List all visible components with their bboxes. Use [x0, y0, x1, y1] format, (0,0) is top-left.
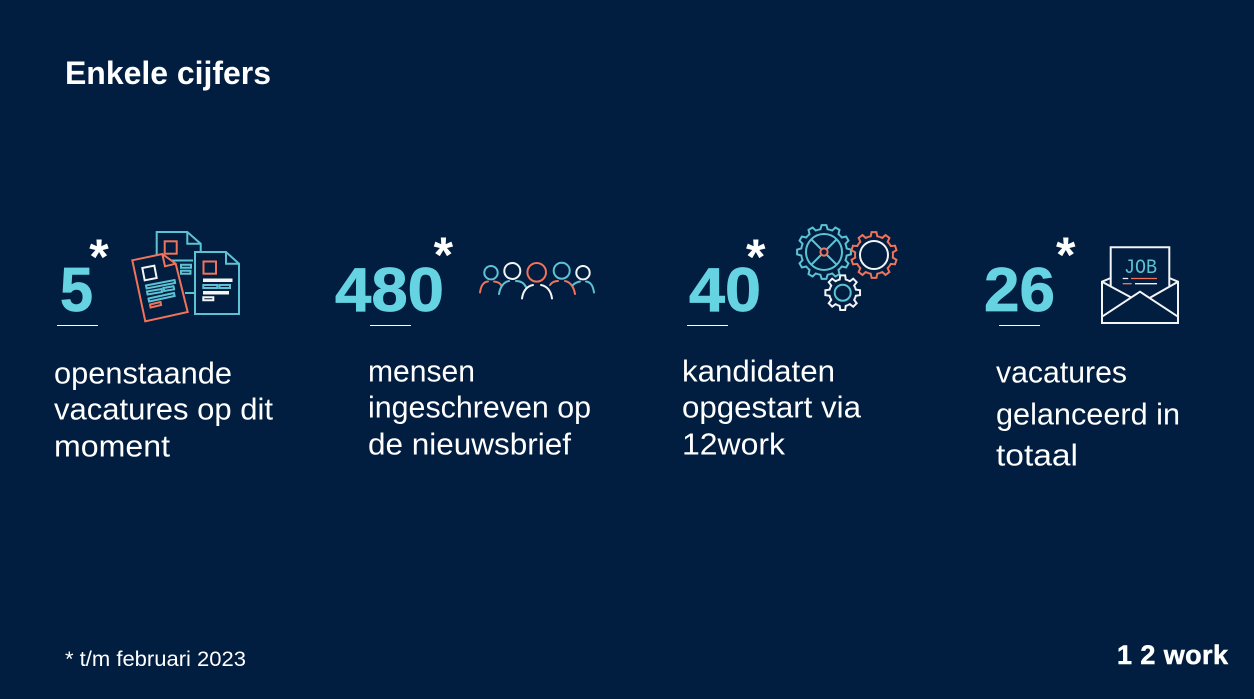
label: moment — [54, 428, 170, 464]
number 26: 26 — [984, 256, 1055, 325]
stat: 26 vacancies launched — [984, 227, 1180, 472]
number 40: 40 — [689, 256, 761, 325]
label: totaal — [996, 438, 1078, 472]
label: opgestart via — [682, 390, 862, 424]
label — [54, 356, 273, 464]
icon: group of people — [480, 263, 594, 298]
asterisk: * — [89, 229, 109, 285]
icon: job envelope — [1102, 247, 1178, 323]
label: 12work — [682, 426, 786, 462]
logo: 12work: 1 2 work — [1117, 640, 1229, 670]
icon: gears — [797, 225, 898, 310]
label: kandidaten — [682, 354, 835, 388]
label: vacatures — [996, 354, 1127, 390]
title: Enkele cijfers — [65, 55, 271, 91]
label: mensen — [368, 354, 475, 388]
asterisk: * — [1056, 227, 1076, 283]
stat: 40 candidates — [682, 225, 898, 462]
footnote: * t/m februari 2023 — [65, 648, 246, 671]
label — [682, 354, 862, 462]
asterisk: * — [434, 227, 454, 283]
label — [996, 354, 1180, 472]
stat: 480 newsletter subscribers — [335, 227, 594, 462]
label: de nieuwsbrief — [368, 426, 571, 462]
number 5: 5 — [60, 256, 93, 325]
stat: 5 open vacancies — [54, 229, 273, 464]
icon: documents — [132, 232, 239, 321]
asterisk: * — [746, 229, 766, 285]
number 480: 480 — [335, 256, 444, 325]
icon: job envelope: JOB — [1124, 257, 1157, 280]
label: ingeschreven op — [368, 390, 591, 424]
label: vacatures op dit — [54, 392, 273, 426]
label — [368, 354, 591, 462]
label: openstaande — [54, 356, 232, 390]
label: gelanceerd in — [996, 396, 1180, 432]
